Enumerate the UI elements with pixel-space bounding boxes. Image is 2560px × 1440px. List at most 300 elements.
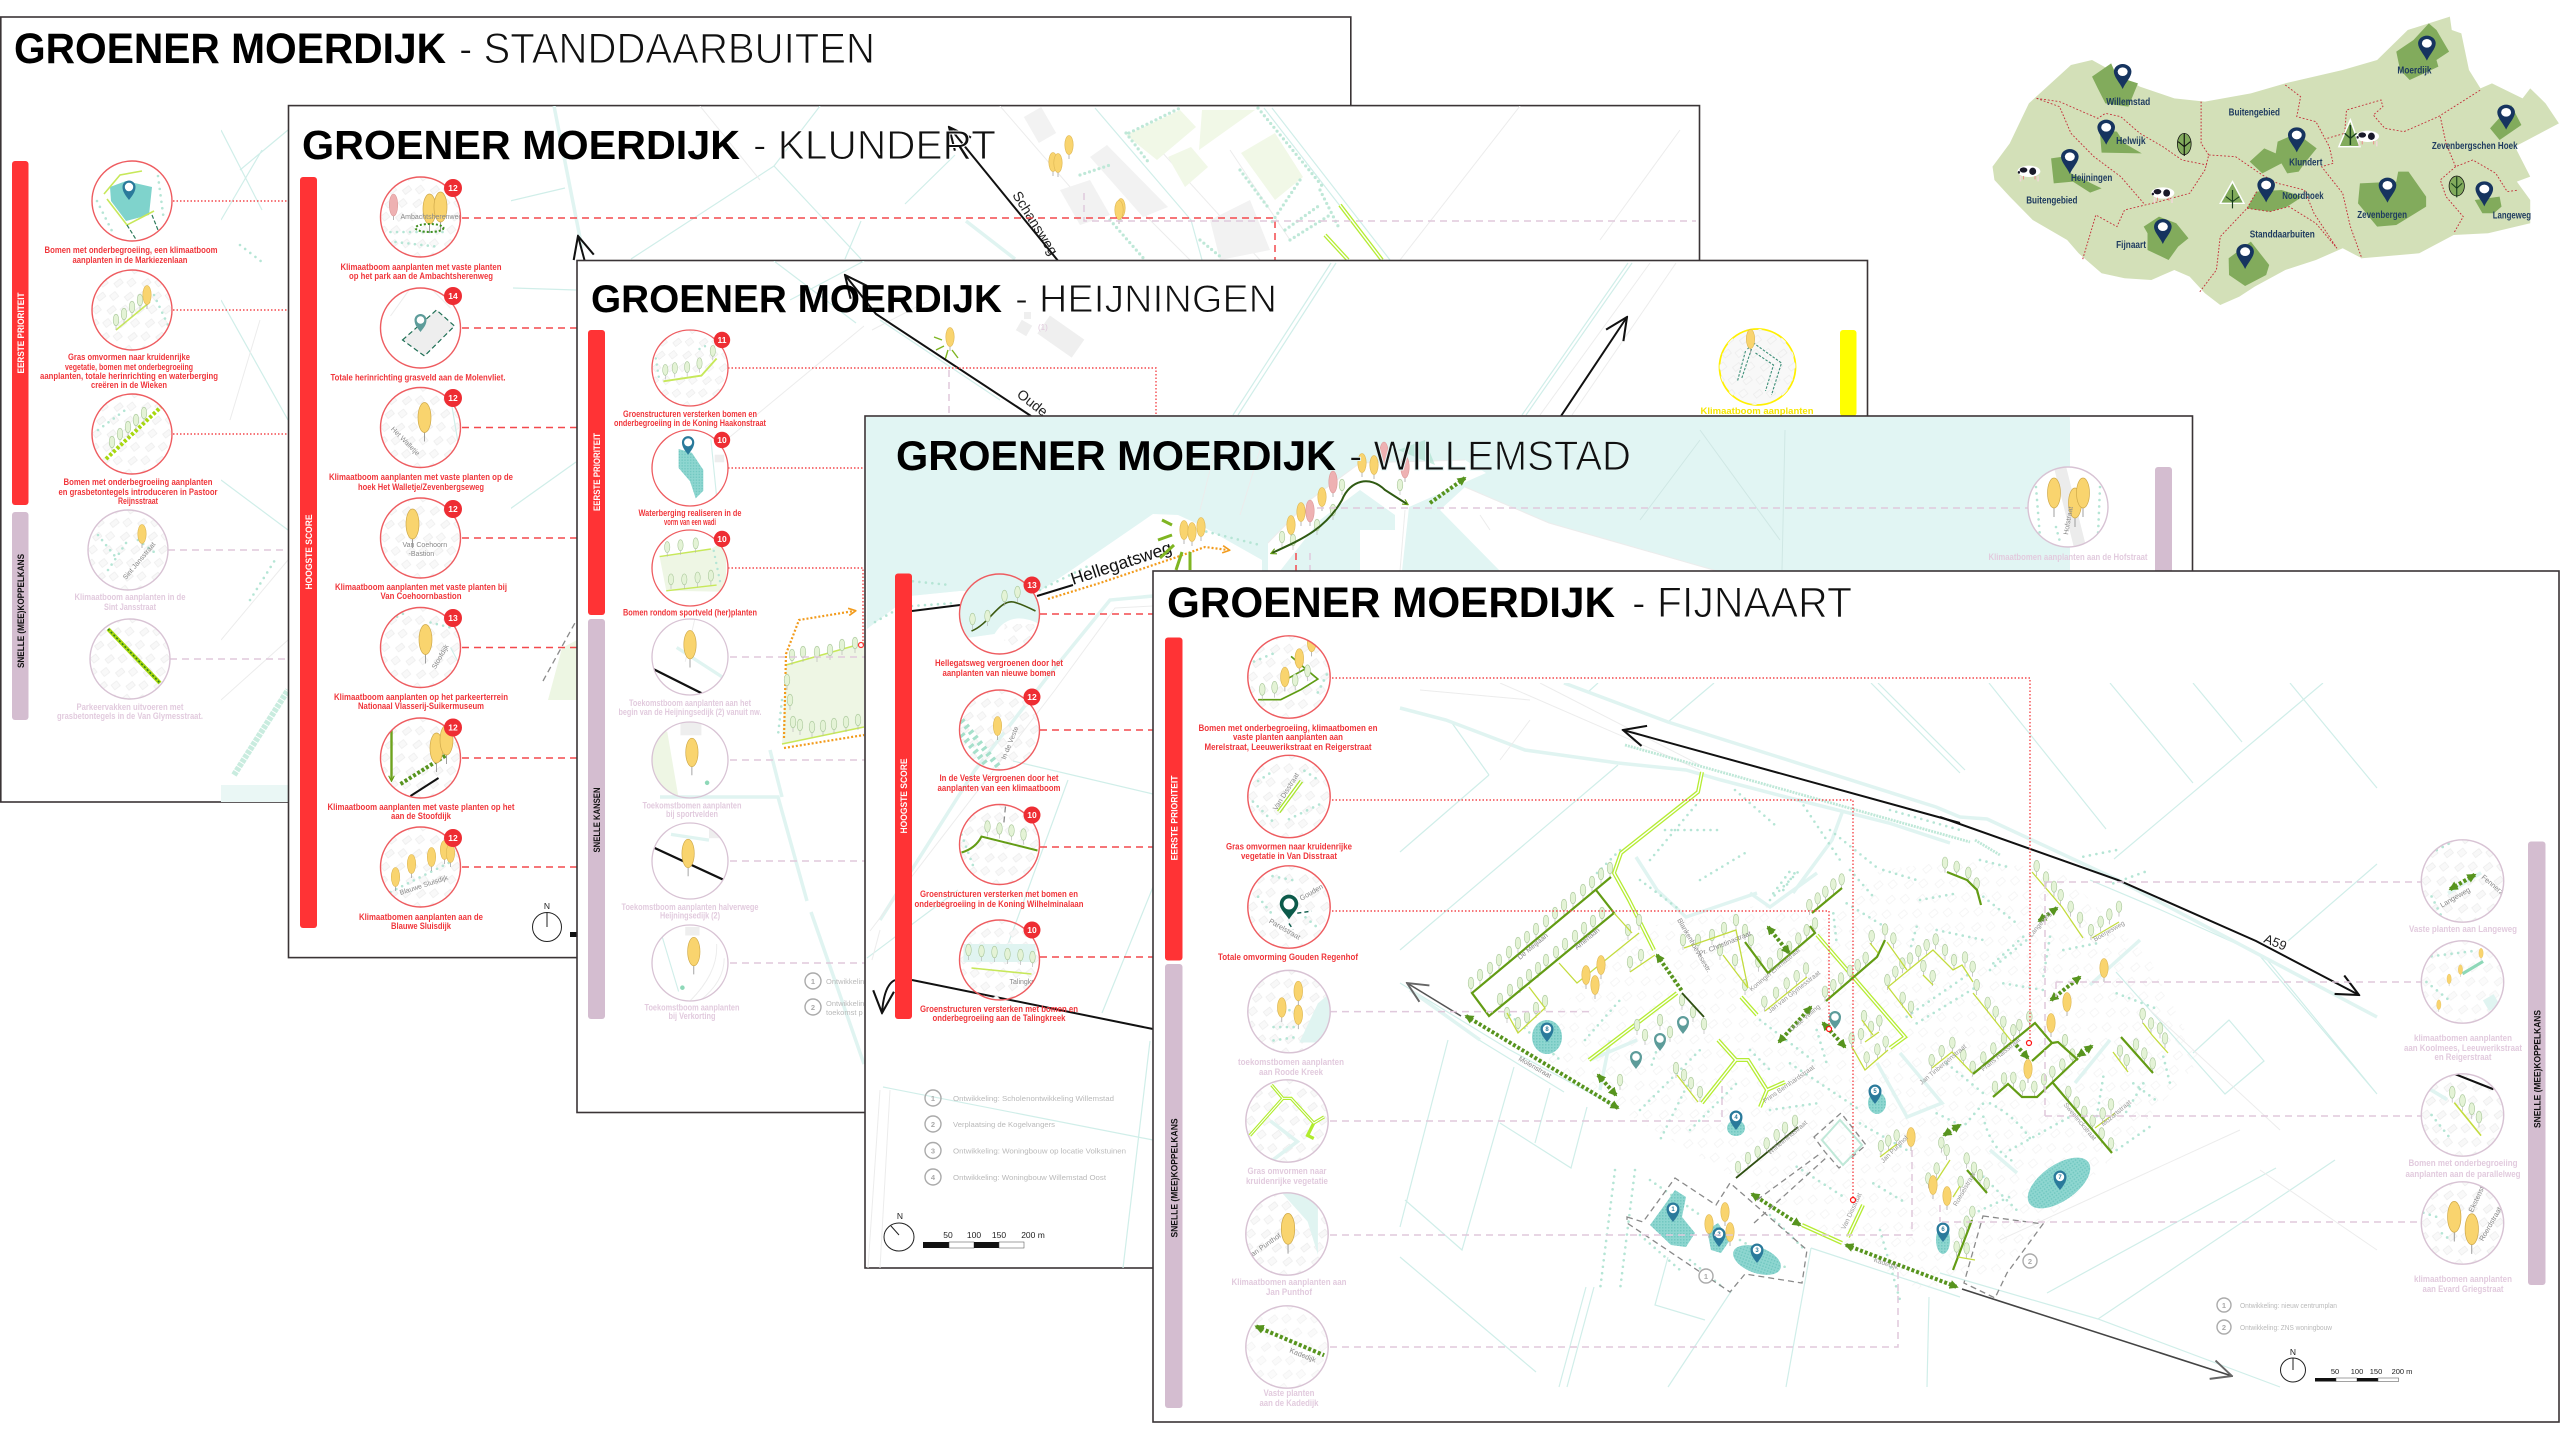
circle: Van Coehoorn [380, 498, 460, 578]
motorway A59 arrows: A59 [2262, 931, 2289, 953]
legend: Heijningen development: Ontwikkeling [826, 999, 869, 1008]
legend: Willemstad development: Verplaatsing de Kogelvangers [953, 1120, 1055, 1129]
place names: Moerdijk [2397, 65, 2432, 76]
labels: Heijningen: Waterberging realiseren in de [638, 508, 742, 518]
municipality outline [1993, 17, 2559, 305]
labels: Fijnaart right [2404, 924, 2522, 1294]
legend: Heijningen development: 1 [811, 977, 815, 986]
thin street lines [1507, 872, 2168, 1260]
north arrow and scale: Fijnaart: 100 [2351, 1367, 2363, 1376]
panel: Willemstad [865, 416, 2192, 1268]
street names east: Kadedijk [1873, 1257, 1900, 1272]
circle: Van Coehoorn: Van Coehoorn [402, 542, 447, 549]
labels: Fijnaart left: Gras omvormen naar kruidenrijke [1226, 842, 1352, 852]
place names: Standdaarbuiten [2250, 229, 2315, 240]
labels: Standdaarbuiten: Klimaatboom aanplanten in de [74, 592, 186, 602]
place names: Buitengebied [2229, 107, 2280, 118]
circle: Hofstraat: Hofstraat [2063, 506, 2075, 535]
tree dots [1510, 790, 1960, 1300]
badges: Klundert scores: 12 [448, 833, 458, 843]
map: Standdaarbuiten background [221, 130, 288, 802]
place names [2026, 65, 2531, 251]
trees east [1748, 857, 2168, 1258]
circle: Verkorting [652, 925, 728, 1001]
labels: Standdaarbuiten: Gras omvormen naar kruidenrijke [68, 352, 190, 362]
panel: Heijningen [577, 260, 1868, 1112]
circle: Kadedijk: Kadedijk [1288, 1346, 1318, 1365]
street names east: Sweelinckstraat [2062, 1102, 2097, 1142]
north arrow: Klundert [532, 901, 577, 942]
labels: Fijnaart right: klimaatbomen aanplanten [2414, 1033, 2512, 1043]
labels: Standdaarbuiten: Parkeervakken uitvoeren met [76, 702, 184, 712]
badges: Klundert scores: 14 [448, 291, 458, 301]
badges: Klundert scores: 12 [448, 393, 458, 403]
circle: Molenvliet [380, 288, 460, 368]
panel: Fijnaart [1153, 571, 2559, 1422]
labels: Fijnaart right: klimaatbomen aanplanten [2414, 1274, 2512, 1284]
street names west: Blankenhoevesestr. [1675, 918, 1712, 974]
labels: Fijnaart right: aan Koolmees, Leeuwerikstraat [2404, 1043, 2522, 1053]
map development markers [1699, 1254, 2037, 1283]
place names: Heijningen [2071, 173, 2112, 184]
labels: Klundert: op het park aan de Ambachtsherenweg [349, 271, 493, 281]
icons: trees and cows [2017, 120, 2464, 208]
street names east: Mozartstraat [2100, 1099, 2133, 1128]
legend: Fijnaart development: Ontwikkeling: ZNS woningbouw [2240, 1323, 2333, 1332]
centrum square [1822, 1120, 1862, 1165]
bar: yellow [1840, 330, 1856, 416]
labels: Standdaarbuiten: creëren in de Wieken [91, 380, 167, 390]
north arrow: Klundert: N [544, 901, 550, 911]
labels: Fijnaart left: Gras omvormen naar [1248, 1166, 1327, 1176]
bar: snelle (mee)koppelkans: SNELLE (MEE)KOPPELKANS [1170, 1118, 1180, 1238]
street names east: Boerjesweg [2092, 920, 2126, 943]
circle: Talingkreek [960, 920, 1045, 1000]
north arrow and scale: Fijnaart [2280, 1347, 2412, 1382]
dark planting lines [1682, 993, 1798, 1178]
title: Heijningen [591, 278, 1277, 321]
place names: Zevenbergschen Hoek [2432, 141, 2518, 152]
light green street routes [1589, 772, 1905, 1243]
circle: Wieken [92, 270, 172, 350]
circle: Stoofdijk [380, 718, 460, 798]
labels: Klundert: Klimaatboom aanplanten met vaste planten op de [329, 472, 513, 482]
street names east: Prins Bernhardstraat [1762, 1064, 1816, 1105]
circle: Evard Griegstraat [2421, 1173, 2504, 1264]
badges: Willemstad scores [1024, 576, 1040, 938]
pins: 5 [1873, 1089, 1877, 1095]
badges: Willemstad scores: 13 [1027, 580, 1037, 590]
town areas [2051, 23, 2521, 286]
title: Heijningen: - HEIJNINGEN [1015, 278, 1277, 321]
map: Fijnaart [1400, 683, 2377, 1387]
labels: Fijnaart left: vaste planten aanplanten aan [1233, 732, 1343, 742]
circle: Langeweg [2421, 840, 2510, 922]
labels: Fijnaart left: Klimaatbomen aanplanten aan [1232, 1277, 1346, 1287]
circle: Jan Punthof: Jan Punthof [1246, 1230, 1283, 1260]
legend: Fijnaart development: 1 [2222, 1301, 2226, 1310]
map: Willemstad background: Hellegatsweg [1068, 537, 1174, 589]
labels: Klundert: Nationaal Vlasserij-Suikermuseum [358, 701, 484, 711]
leader lines [1040, 614, 1153, 957]
street names west [1517, 918, 1752, 1080]
circle: Langeweg: Fennerzijl [2480, 873, 2510, 900]
circle: Hellegatsweg [960, 574, 1040, 654]
leader lines [728, 368, 1156, 963]
title: Standdaarbuiten: - STANDDAARBUITEN [459, 25, 875, 73]
circle: Markiezenlaan [92, 161, 172, 241]
street names east: Koningin Emmastraat [1748, 947, 1802, 993]
labels: Willemstad [914, 658, 1084, 1023]
circle: Kadedijk [1246, 1306, 1328, 1388]
title: Standdaarbuiten [14, 25, 875, 73]
legend: Fijnaart development [2217, 1298, 2337, 1334]
canals and polder lines [1400, 683, 2377, 1387]
location pins [2061, 36, 2515, 269]
labels: Heijningen: Toekomstbomen aanplanten [642, 800, 742, 810]
labels: Willemstad: onderbegroeiing aan de Talingkreek [932, 1013, 1066, 1023]
bar: hoogste score: HOOGSTE SCORE [899, 758, 910, 834]
circle: halverwege Heijningsedijk [652, 823, 728, 899]
north arrow and scale: Willemstad: 100 [967, 1230, 981, 1240]
map: Klundert background: Schansweg [1009, 188, 1061, 258]
circle: Jan Punthof [1246, 1193, 1328, 1275]
bar: eerste prioriteit: EERSTE PRIORITEIT [592, 433, 603, 511]
circle: sportvelden [652, 722, 728, 798]
north arrow and scale: Willemstad: 50 [943, 1230, 953, 1240]
labels: Klundert [328, 262, 514, 931]
circle: Van Disstraat: Van Disstraat [1271, 771, 1301, 812]
bar: hoogste score [895, 574, 912, 1019]
labels: Heijningen: Toekomstboom aanplanten [644, 1003, 740, 1013]
legend: Heijningen development [805, 973, 869, 1017]
label: Hofstraat: Klimaatbomen aanplanten aan de Hofstraat [1988, 552, 2148, 562]
street names east: Frans Halsstraat [1980, 1036, 2022, 1073]
leader lines [1330, 678, 2421, 1347]
labels: Willemstad: aanplanten van een klimaatboom [938, 783, 1060, 793]
north arrow and scale: Willemstad: 150 [992, 1230, 1006, 1240]
circle: Stoofdijk parkeerterrein [380, 608, 460, 688]
pins: 1 [1671, 1207, 1675, 1213]
place names: Willemstad [2106, 97, 2150, 108]
badges: Klundert scores: 12 [448, 183, 458, 193]
place names: Fijnaart [2116, 240, 2146, 251]
street names east: Langeweg [2028, 910, 2053, 939]
labels: Heijningen: vorm van een wadi [664, 517, 716, 527]
north arrow and scale: Fijnaart: 150 [2370, 1367, 2382, 1376]
badges: Heijningen scores: 10 [717, 534, 727, 544]
circle: Talingkreek: Talingkreek [1010, 979, 1045, 986]
map development markers: 1 [1704, 1272, 1708, 1281]
circle: parallelweg [2421, 1074, 2504, 1156]
labels: Fijnaart left: toekomstbomen aanplanten [1238, 1057, 1344, 1067]
labels: Willemstad: Groenstructuren versterken met bomen en [920, 1004, 1078, 1014]
bar: eerste prioriteit [12, 161, 28, 505]
labels: Klundert: hoek Het Walletje/Zevenbergseweg [358, 482, 484, 492]
labels: Willemstad: onderbegroeiing in de Koning Wilhelminalaan [914, 899, 1084, 909]
title: Heijningen: GROENER MOERDIJK [591, 278, 1002, 321]
fields [1126, 110, 1303, 200]
north arrow and scale: Willemstad [884, 1211, 1045, 1251]
north arrow and scale: Willemstad: N [897, 1211, 903, 1221]
badges: Heijningen scores [714, 332, 730, 547]
circle: Ambachtsherenweg [380, 177, 462, 257]
circle: In de Veste: In de Veste [1001, 726, 1021, 761]
title: Klundert [302, 122, 996, 168]
street names west: Amerlaan [1574, 927, 1601, 952]
dark green streets [1472, 872, 2153, 1270]
labels: Klundert: Van Coehoornbastion [380, 591, 462, 601]
title: Willemstad: - WILLEMSTAD [1349, 432, 1631, 479]
legend: Fijnaart development: Ontwikkeling: nieuw centrumplan [2240, 1301, 2337, 1310]
labels: Klundert: Klimaatboom aanplanten met vaste planten [340, 262, 502, 272]
circle: Gouden Regenhof: Gouden Regenhof [1298, 865, 1354, 903]
circle: Hofstraat [2028, 467, 2108, 547]
legend: Willemstad development: 3 [931, 1146, 935, 1156]
labels: Fijnaart right: Bomen met onderbegroeiing [2408, 1158, 2518, 1168]
place names: Helwijk [2116, 136, 2146, 147]
circle: Van Glymesstraat [90, 619, 170, 699]
circle: Evard Griegstraat: Ekstenstraat [2466, 1173, 2492, 1214]
labels: Fijnaart left: aan de Kadedijk [1260, 1398, 1319, 1408]
labels: Fijnaart left: vegetatie in Van Disstraat [1241, 851, 1337, 861]
labels: Willemstad: aanplanten van nieuwe bomen [942, 668, 1056, 678]
labels: Standdaarbuiten: grasbetontegels in de Van Glymesstraat. [57, 711, 203, 721]
circle: Roode Kreek [1248, 970, 1330, 1053]
circle: kruidenrijke vegetatie [1246, 1080, 1328, 1162]
circle: Van Disstraat [1248, 755, 1330, 838]
circle: Gouden Regenhof: Parelstraat [1267, 916, 1302, 942]
circle: Van Coehoorn: -Bastion [408, 551, 434, 558]
circle: Ambachtsherenweg: Ambachtsherenweg [400, 214, 462, 221]
legend: Willemstad development: Ontwikkeling: Woningbouw Willemstad Oost [953, 1173, 1107, 1182]
circle: Stoofdijk parkeerterrein: Stoofdijk [431, 643, 451, 670]
street names east: Oude Veiling [1788, 1003, 1822, 1033]
labels: Heijningen: Heijningsedijk (2) [660, 911, 720, 921]
legend: Willemstad development: Ontwikkeling: Scholenontwikkeling Willemstad [953, 1094, 1114, 1103]
badges: Klundert scores [444, 179, 462, 847]
overview map: gemeente Moerdijk [1993, 17, 2559, 305]
circle: yellow klimaatboom Heijningen [1720, 329, 1796, 405]
labels: Klundert: Klimaatboom aanplanten op het parkeerterrein [334, 692, 508, 702]
street names east: Roeselstraat [1952, 1172, 1977, 1208]
labels: Standdaarbuiten: Reijnsstraat [118, 496, 158, 506]
map: Heijningen background: (1) [1038, 323, 1048, 332]
street names east [1748, 910, 2133, 1272]
north arrow and scale: Fijnaart: N [2290, 1347, 2296, 1357]
circle: Koolmees [2421, 941, 2504, 1023]
bar: Willemstad snelle kansen [2155, 467, 2172, 587]
badges: Willemstad scores: 10 [1027, 810, 1037, 820]
street names west: De Meijlaan [1517, 932, 1550, 962]
yellow climate trees [1582, 956, 2108, 1246]
pins: 2 [1717, 1232, 1721, 1238]
labels: Heijningen: Bomen rondom sportveld (her)planten [623, 608, 757, 618]
title: Standdaarbuiten: GROENER MOERDIJK [14, 25, 446, 73]
labels: Klundert: Totale herinrichting grasveld aan de Molenvliet. [330, 372, 506, 382]
bar: eerste prioriteit: EERSTE PRIORITEIT [1170, 775, 1180, 860]
labels: Standdaarbuiten: Bomen met onderbegroeiing aanplanten [64, 477, 212, 487]
bar: hoogste score: HOOGSTE SCORE [304, 514, 315, 590]
bar: snelle kansen: SNELLE KANSEN [592, 787, 603, 852]
bar: hoogste score [300, 177, 317, 928]
place names: Zevenbergen [2357, 210, 2407, 221]
badges: Klundert scores: 12 [448, 722, 458, 732]
legend: Willemstad development [925, 1090, 1126, 1185]
north arrow and scale: Fijnaart: 50 [2331, 1367, 2339, 1376]
title: Fijnaart: - FIJNAART [1632, 579, 1852, 627]
badges: Willemstad scores: 12 [1027, 692, 1037, 702]
pins: 7 [2058, 1175, 2062, 1181]
street names east: Jan van Glymesstraat [1767, 970, 1822, 1015]
street names west: Pr. Christinastraat [1698, 931, 1752, 958]
circle: Het Walletje: Het Walletje [389, 426, 421, 457]
legend: Heijningen development: toekomst p [826, 1008, 863, 1017]
legend: Willemstad development: 2 [931, 1120, 935, 1129]
circle: Het Walletje [380, 388, 460, 468]
circle: Langeweg: Langeweg [2438, 885, 2472, 910]
labels: Fijnaart left: Bomen met onderbegroeiing, klimaatbomen en [1198, 723, 1378, 733]
street names east: Van Disstraat [1840, 1192, 1864, 1231]
circle: Merelstraat [1248, 632, 1330, 718]
legend: Willemstad development: Ontwikkeling: Woningbouw op locatie Volkstuinen [953, 1146, 1126, 1156]
title: Fijnaart: GROENER MOERDIJK [1167, 579, 1615, 627]
labels: Willemstad: In de Veste Vergroenen door het [940, 773, 1058, 783]
trees west [1468, 862, 1751, 1177]
labels: Standdaarbuiten: Bomen met onderbegroeiing, een klimaatboom [44, 245, 218, 255]
town texture [1530, 860, 2200, 1290]
place names: Langeweg [2493, 210, 2531, 221]
legend: Heijningen development: 2 [811, 1003, 815, 1012]
circle: Heijningsedijk begin [652, 619, 728, 695]
labels: Standdaarbuiten: aanplanten in de Markiezenlaan [72, 255, 188, 265]
labels: Fijnaart left [1198, 723, 1378, 1408]
pins: 4 [1734, 1115, 1738, 1121]
map development markers: 2 [2028, 1257, 2032, 1266]
circle: Pastoor Reijnsstraat [92, 394, 172, 474]
legend: Willemstad development: 1 [931, 1094, 935, 1103]
pins [1540, 1011, 2066, 1263]
panel: Klundert [288, 106, 1700, 958]
bar: snelle (mee)koppelkans right: SNELLE (MEE)KOPPELKANS [2532, 1010, 2544, 1128]
labels: Fijnaart right: aanplanten aan de parallelweg [2406, 1169, 2520, 1179]
labels: Willemstad: Groenstructuren versterken met bomen en [920, 889, 1078, 899]
labels: Fijnaart left: Vaste planten [1264, 1388, 1314, 1398]
legend: Fijnaart development: 2 [2222, 1323, 2226, 1332]
labels: Fijnaart left: Merelstraat, Leeuwerikstraat en Reigerstraat [1204, 742, 1372, 752]
bar: eerste prioriteit [1165, 638, 1182, 960]
labels: Klundert: aan de Stoofdijk [391, 811, 452, 821]
title: Willemstad: GROENER MOERDIJK [896, 432, 1336, 479]
circle: Blauwe Sluisdijk [380, 827, 460, 907]
labels: Willemstad: Hellegatsweg vergroenen door het [935, 658, 1063, 668]
circle: sportveld [652, 530, 728, 606]
circle: Sint Jansstraat [88, 510, 168, 590]
labels: Standdaarbuiten: Sint Jansstraat [104, 602, 156, 612]
map: Heijningen background [660, 261, 1676, 1064]
street names east: Jan Punthof [1880, 1135, 1910, 1165]
bar: snelle (mee)koppelkans: SNELLE (MEE)KOPPELKANS [16, 554, 27, 668]
labels: Heijningen: begin van de Heijningsedijk (2) vanuit nw. [618, 707, 762, 717]
labels: Klundert: Blauwe Sluisdijk [391, 921, 452, 931]
circle: Blauwe Sluisdijk: Blauwe Sluisdijk [399, 874, 450, 897]
street names east: Jan Tinbergenstraat [1918, 1043, 1968, 1087]
street names east: Wilhelminastraat [1767, 1119, 1809, 1157]
bar: snelle kansen [588, 619, 605, 1019]
labels: Fijnaart left: Totale omvorming Gouden Regenhof [1218, 952, 1359, 962]
labels: Fijnaart left: kruidenrijke vegetatie [1246, 1176, 1328, 1186]
title: Klundert: GROENER MOERDIJK [302, 122, 740, 168]
north arrow and scale: Fijnaart: 200 m [2392, 1367, 2412, 1376]
map: Klundert background [510, 106, 1680, 700]
label: yellow: Klimaatboom aanplanten [1700, 406, 1814, 416]
labels: Heijningen: Groenstructuren versterken bomen en [623, 409, 757, 419]
motorway A59 arrows [1407, 730, 2359, 1376]
circle: Sint Jansstraat: Sint Jansstraat [122, 541, 157, 581]
labels: Fijnaart right: en Reigerstraat [2434, 1052, 2492, 1062]
north arrow and scale: Willemstad: 200 m [1021, 1230, 1045, 1240]
labels: Standdaarbuiten [40, 245, 218, 721]
labels: Klundert: Klimaatboom aanplanten met vaste planten op het [328, 802, 514, 812]
badges: Willemstad scores: 10 [1027, 925, 1037, 935]
water basins [1532, 1020, 2099, 1281]
labels: Klundert: Klimaatbomen aanplanten aan de [359, 912, 483, 922]
leader lines [462, 193, 1696, 867]
pins: 3 [1755, 1248, 1759, 1254]
badges: Klundert scores: 12 [448, 504, 458, 514]
labels: Heijningen: bij sportvelden [666, 809, 718, 819]
bar: snelle (mee)koppelkans [1165, 964, 1182, 1408]
labels: Heijningen: bij Verkorting [668, 1011, 716, 1021]
labels: Standdaarbuiten: en grasbetontegels introduceren in Pastoor [58, 487, 218, 497]
labels: Heijningen: Toekomstboom aanplanten aan het [629, 698, 751, 708]
circle: Evard Griegstraat: Roerdstraat [2477, 1205, 2504, 1243]
circle: Koning Haakonstraat [652, 330, 728, 406]
bar: eerste prioriteit [588, 330, 605, 615]
circle: Koning Wilhelminalaan [960, 804, 1040, 884]
labels: Fijnaart right: aan Evard Griegstraat [2422, 1284, 2504, 1294]
labels: Fijnaart left: aan Roode Kreek [1259, 1067, 1324, 1077]
badges: Klundert scores: 13 [448, 613, 458, 623]
pins: 8 [1545, 1027, 1549, 1033]
legend: Heijningen development: Ontwikkeling [826, 977, 869, 986]
labels: Klundert: Klimaatboom aanplanten met vaste planten bij [335, 582, 507, 592]
place names: Klundert [2289, 157, 2323, 168]
circle: Gouden Regenhof [1248, 865, 1354, 948]
labels: Heijningen: Toekomstboom aanplanten halverwege [622, 902, 758, 912]
title: Fijnaart [1167, 579, 1852, 627]
district borders [2037, 85, 2519, 293]
buildings [1024, 107, 1270, 260]
bar: snelle (mee)koppelkans [12, 512, 28, 720]
title: Klundert: - KLUNDERT [753, 122, 996, 168]
bar: eerste prioriteit: EERSTE PRIORITEIT [16, 292, 27, 374]
dashed green planting arrows [1466, 908, 2092, 1287]
labels: Heijningen [614, 409, 766, 1021]
development boundaries [1627, 1113, 2043, 1298]
map: Heijningen background: Oude [1014, 386, 1051, 420]
badges: Heijningen scores: 11 [718, 335, 727, 345]
place names: Noordhoek [2282, 191, 2324, 202]
place names: Buitengebied [2026, 195, 2077, 206]
labels: Fijnaart right: Vaste planten aan Langeweg [2409, 924, 2517, 934]
leader lines [168, 201, 288, 659]
map: Willemstad background [866, 417, 2070, 1268]
labels: Fijnaart left: Jan Punthof [1266, 1287, 1313, 1297]
circle: In de Veste [960, 690, 1040, 770]
title: Willemstad [896, 432, 1631, 479]
bar: snelle (mee)koppelkans right [2528, 842, 2546, 1285]
